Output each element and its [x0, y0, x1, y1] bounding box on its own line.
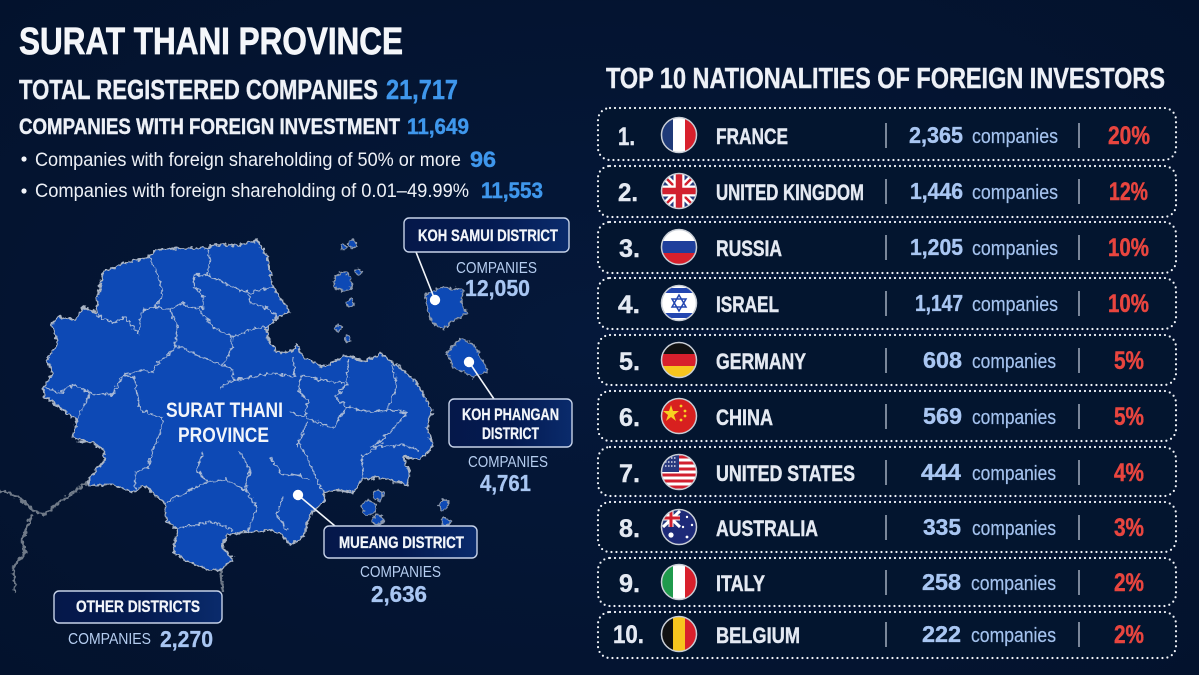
row 3: Russia: 3.: [619, 235, 640, 263]
row 7: United States: 444: [921, 459, 961, 485]
row 9: Italy: companies: [971, 573, 1056, 595]
row 3: Russia: RUSSIA: [716, 236, 782, 261]
bullet: 50% or more: 96: [470, 147, 496, 172]
row 9: Italy: [598, 558, 1176, 606]
row 4: Israel: 10%: [1108, 290, 1149, 318]
row 7: United States: UNITED STATES: [716, 461, 855, 486]
callout: Other districts: 2,270: [160, 626, 213, 652]
callout: Koh Samui: 12,050: [465, 275, 530, 301]
callout: Other districts: OTHER DISTRICTS: [76, 597, 200, 616]
row 10: Belgium: 2%: [1114, 621, 1144, 649]
flag: United States: [662, 455, 696, 489]
row 8: Australia: [598, 502, 1176, 552]
callout: Koh Phangan: DISTRICT: [482, 424, 539, 443]
map: Surat Thani province: [0, 240, 488, 593]
callout: Mueang: COMPANIES: [360, 564, 441, 581]
row 1: France: companies: [972, 126, 1058, 148]
row 5: Germany: companies: [972, 351, 1056, 373]
flag: Belgium: [662, 617, 696, 651]
flag: Israel: [662, 286, 696, 320]
row 9: Italy: 2%: [1114, 569, 1144, 597]
row 7: United States: [598, 447, 1176, 496]
callout: Koh Samui: COMPANIES: [456, 260, 537, 277]
stat: total registered companies: 21,717: [386, 74, 458, 105]
row 1: France: FRANCE: [716, 124, 788, 149]
flag: China: [662, 399, 696, 433]
callout: Mueang: 2,636: [371, 581, 427, 607]
stat: companies with foreign investment: 11,649: [407, 114, 469, 139]
row 2: United Kingdom: [598, 166, 1176, 217]
row 8: Australia: 3%: [1114, 514, 1144, 542]
stat: companies with foreign investment: COMPANIES WITH FOREIGN INVESTMENT: [19, 114, 400, 139]
bullet: 0.01-49.99%: Companies with foreign shareholding of 0.01–49.99%: [35, 181, 469, 202]
row 5: Germany: 608: [923, 347, 962, 373]
row 4: Israel: 1,147: [915, 290, 963, 316]
row 2: United Kingdom: 1,446: [910, 178, 963, 204]
title: SURAT THANI PROVINCE: [19, 21, 403, 63]
callout: Koh Phangan: COMPANIES: [468, 454, 548, 471]
row 1: France: [598, 108, 1176, 160]
callout: Koh Phangan: KOH PHANGAN: [462, 405, 559, 424]
row 10: Belgium: [598, 612, 1176, 658]
callout: Other districts: COMPANIES: [68, 631, 151, 648]
callout: Mueang: [293, 490, 477, 607]
row 8: Australia: 8.: [619, 515, 640, 543]
row 9: Italy: ITALY: [716, 571, 765, 596]
row 4: Israel: companies: [972, 294, 1058, 316]
row 6: China: 6.: [619, 404, 640, 432]
row 6: China: [598, 391, 1176, 441]
row 3: Russia: [598, 222, 1176, 273]
row 4: Israel: ISRAEL: [716, 292, 779, 317]
row 8: Australia: 335: [923, 514, 961, 540]
row 1: France: 2,365: [909, 122, 963, 148]
flag: France: [662, 118, 696, 152]
row 6: China: CHINA: [716, 405, 773, 430]
stat: total registered companies: TOTAL REGISTERED COMPANIES: [19, 74, 378, 105]
flag: Italy: [662, 565, 696, 599]
row 5: Germany: GERMANY: [716, 349, 806, 374]
row 1: France: 1.: [618, 123, 635, 151]
row 8: Australia: companies: [972, 518, 1056, 540]
bullet: 50% or more: Companies with foreign shareholding of 50% or more: [35, 150, 461, 171]
flag: Australia: [662, 510, 696, 544]
row 5: Germany: 5%: [1114, 347, 1144, 375]
row 3: Russia: companies: [972, 238, 1058, 260]
row 7: United States: 4%: [1114, 459, 1144, 487]
row 6: China: 569: [923, 403, 962, 429]
callout: Koh Phangan: 4,761: [480, 470, 531, 496]
row 5: Germany: [598, 335, 1176, 385]
row 9: Italy: 258: [922, 569, 961, 595]
row 1: France: 20%: [1108, 122, 1150, 150]
row 4: Israel: 4.: [618, 291, 640, 319]
map label: province name: [166, 399, 283, 447]
row 3: Russia: 10%: [1108, 234, 1149, 262]
row 7: United States: companies: [972, 463, 1056, 485]
row 2: United Kingdom: 12%: [1109, 178, 1148, 206]
neighbouring land borders: [0, 482, 223, 593]
row 6: China: 5%: [1114, 403, 1144, 431]
row 2: United Kingdom: UNITED KINGDOM: [716, 180, 864, 205]
row 9: Italy: 9.: [619, 570, 640, 598]
islands: [334, 240, 488, 526]
mainland with district borders: [43, 240, 433, 570]
row 3: Russia: 1,205: [910, 234, 963, 260]
flag: Germany: [662, 343, 696, 377]
map label: province name: SURAT THANI: [166, 399, 283, 422]
row 10: Belgium: companies: [971, 625, 1056, 647]
row 10: Belgium: BELGIUM: [716, 623, 800, 648]
row 5: Germany: 5.: [619, 348, 640, 376]
callout: Koh Samui: KOH SAMUI DISTRICT: [418, 226, 558, 245]
flag: United Kingdom: [662, 174, 696, 208]
callout: Mueang: MUEANG DISTRICT: [339, 533, 464, 552]
map label: province name: PROVINCE: [178, 424, 269, 447]
row 8: Australia: AUSTRALIA: [716, 516, 818, 541]
row 6: China: companies: [972, 407, 1056, 429]
bullet: 0.01-49.99%: 11,553: [481, 178, 543, 203]
row 10: Belgium: 222: [922, 621, 961, 647]
callout: Koh Samui: [404, 218, 569, 305]
row 2: United Kingdom: companies: [972, 182, 1058, 204]
callout: Other districts: [54, 591, 222, 652]
row 4: Israel: [598, 278, 1176, 329]
callout: Koh Phangan: [449, 357, 572, 496]
row 2: United Kingdom: 2.: [618, 179, 638, 207]
row 7: United States: 7.: [619, 460, 640, 488]
flag: Russia: [662, 230, 696, 264]
row 10: Belgium: 10.: [613, 621, 644, 649]
